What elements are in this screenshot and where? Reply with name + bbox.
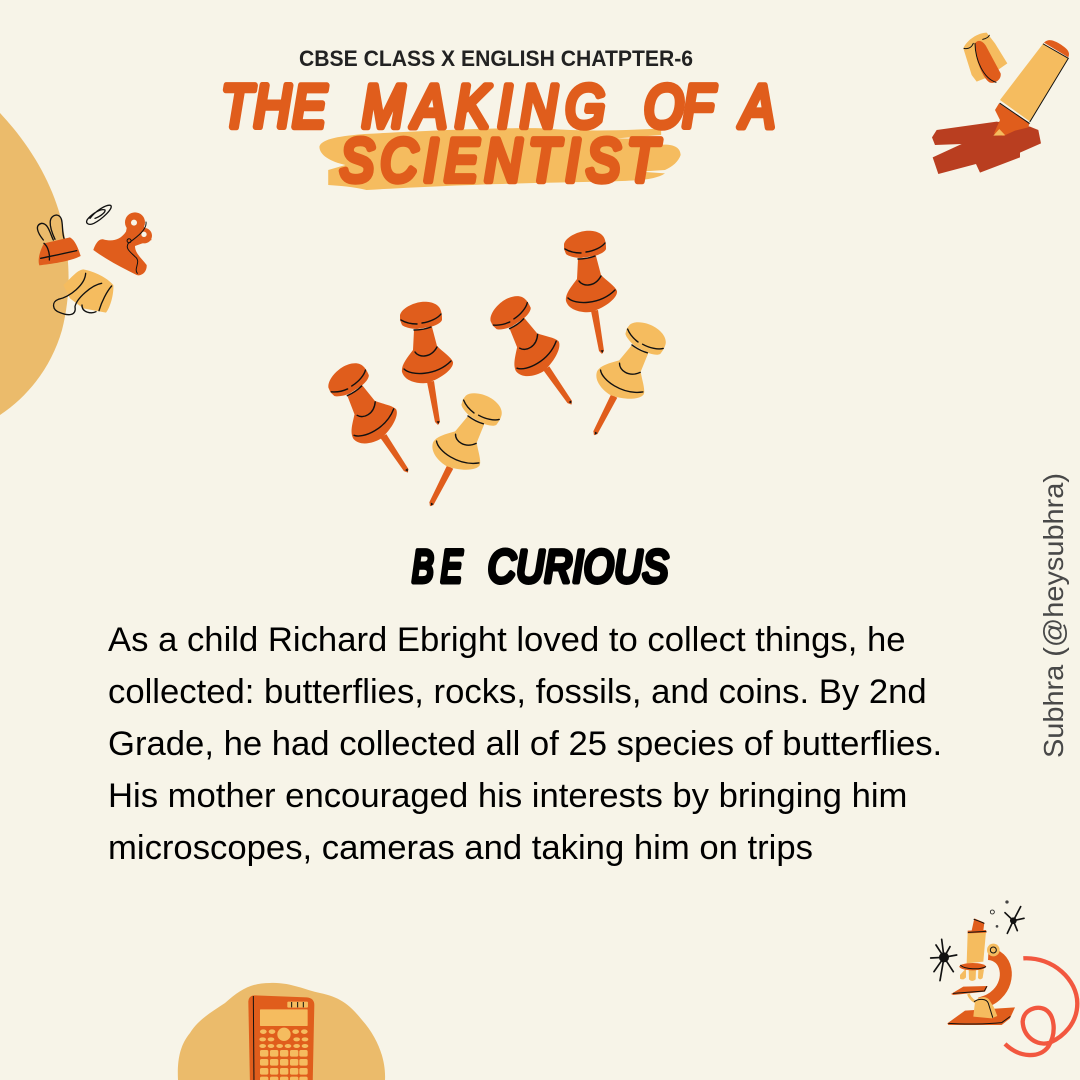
blob: left background shape <box>0 113 69 415</box>
title line one: OF <box>644 73 716 140</box>
blob: bottom background shape <box>178 983 385 1080</box>
title line one: MAKING <box>362 73 605 140</box>
icon: calculator <box>248 995 314 1080</box>
icon: highlighter <box>932 33 1069 174</box>
body paragraph: Grade, he had collected all of 25 species of butterflies. <box>108 725 942 763</box>
icon: microscope and swirl <box>931 900 1077 1055</box>
body paragraph: As a child Richard Ebright loved to collect things, he <box>108 621 906 659</box>
author credit: Subhra (@heysubhra) <box>1038 473 1069 758</box>
section heading <box>412 541 668 592</box>
header line: CBSE CLASS X ENGLISH CHATPTER-6 <box>299 46 693 71</box>
title line one <box>221 73 775 140</box>
pin two <box>400 302 453 425</box>
body paragraph <box>108 621 942 867</box>
body paragraph: microscopes, cameras and taking him on trips <box>108 829 813 867</box>
pin five <box>400 385 516 515</box>
brush stroke behind SCIENTIST <box>319 128 681 190</box>
body paragraph: His mother encouraged his interests by bringing him <box>108 777 907 815</box>
section heading: CURIOUS <box>488 541 668 592</box>
title line two: SCIENTIST <box>340 127 662 194</box>
title line one: A <box>738 73 775 140</box>
body paragraph: collected: butterflies, rocks, fossils, and coins. By 2nd <box>108 673 927 711</box>
pin six <box>564 314 680 444</box>
icon: push pins group <box>323 231 680 515</box>
title line one: THE <box>221 73 327 140</box>
icon: binder clips and paperclip <box>37 205 152 315</box>
section heading: BE <box>412 543 463 592</box>
pin three <box>485 287 585 421</box>
pin one <box>323 354 422 488</box>
pin four <box>564 231 617 354</box>
